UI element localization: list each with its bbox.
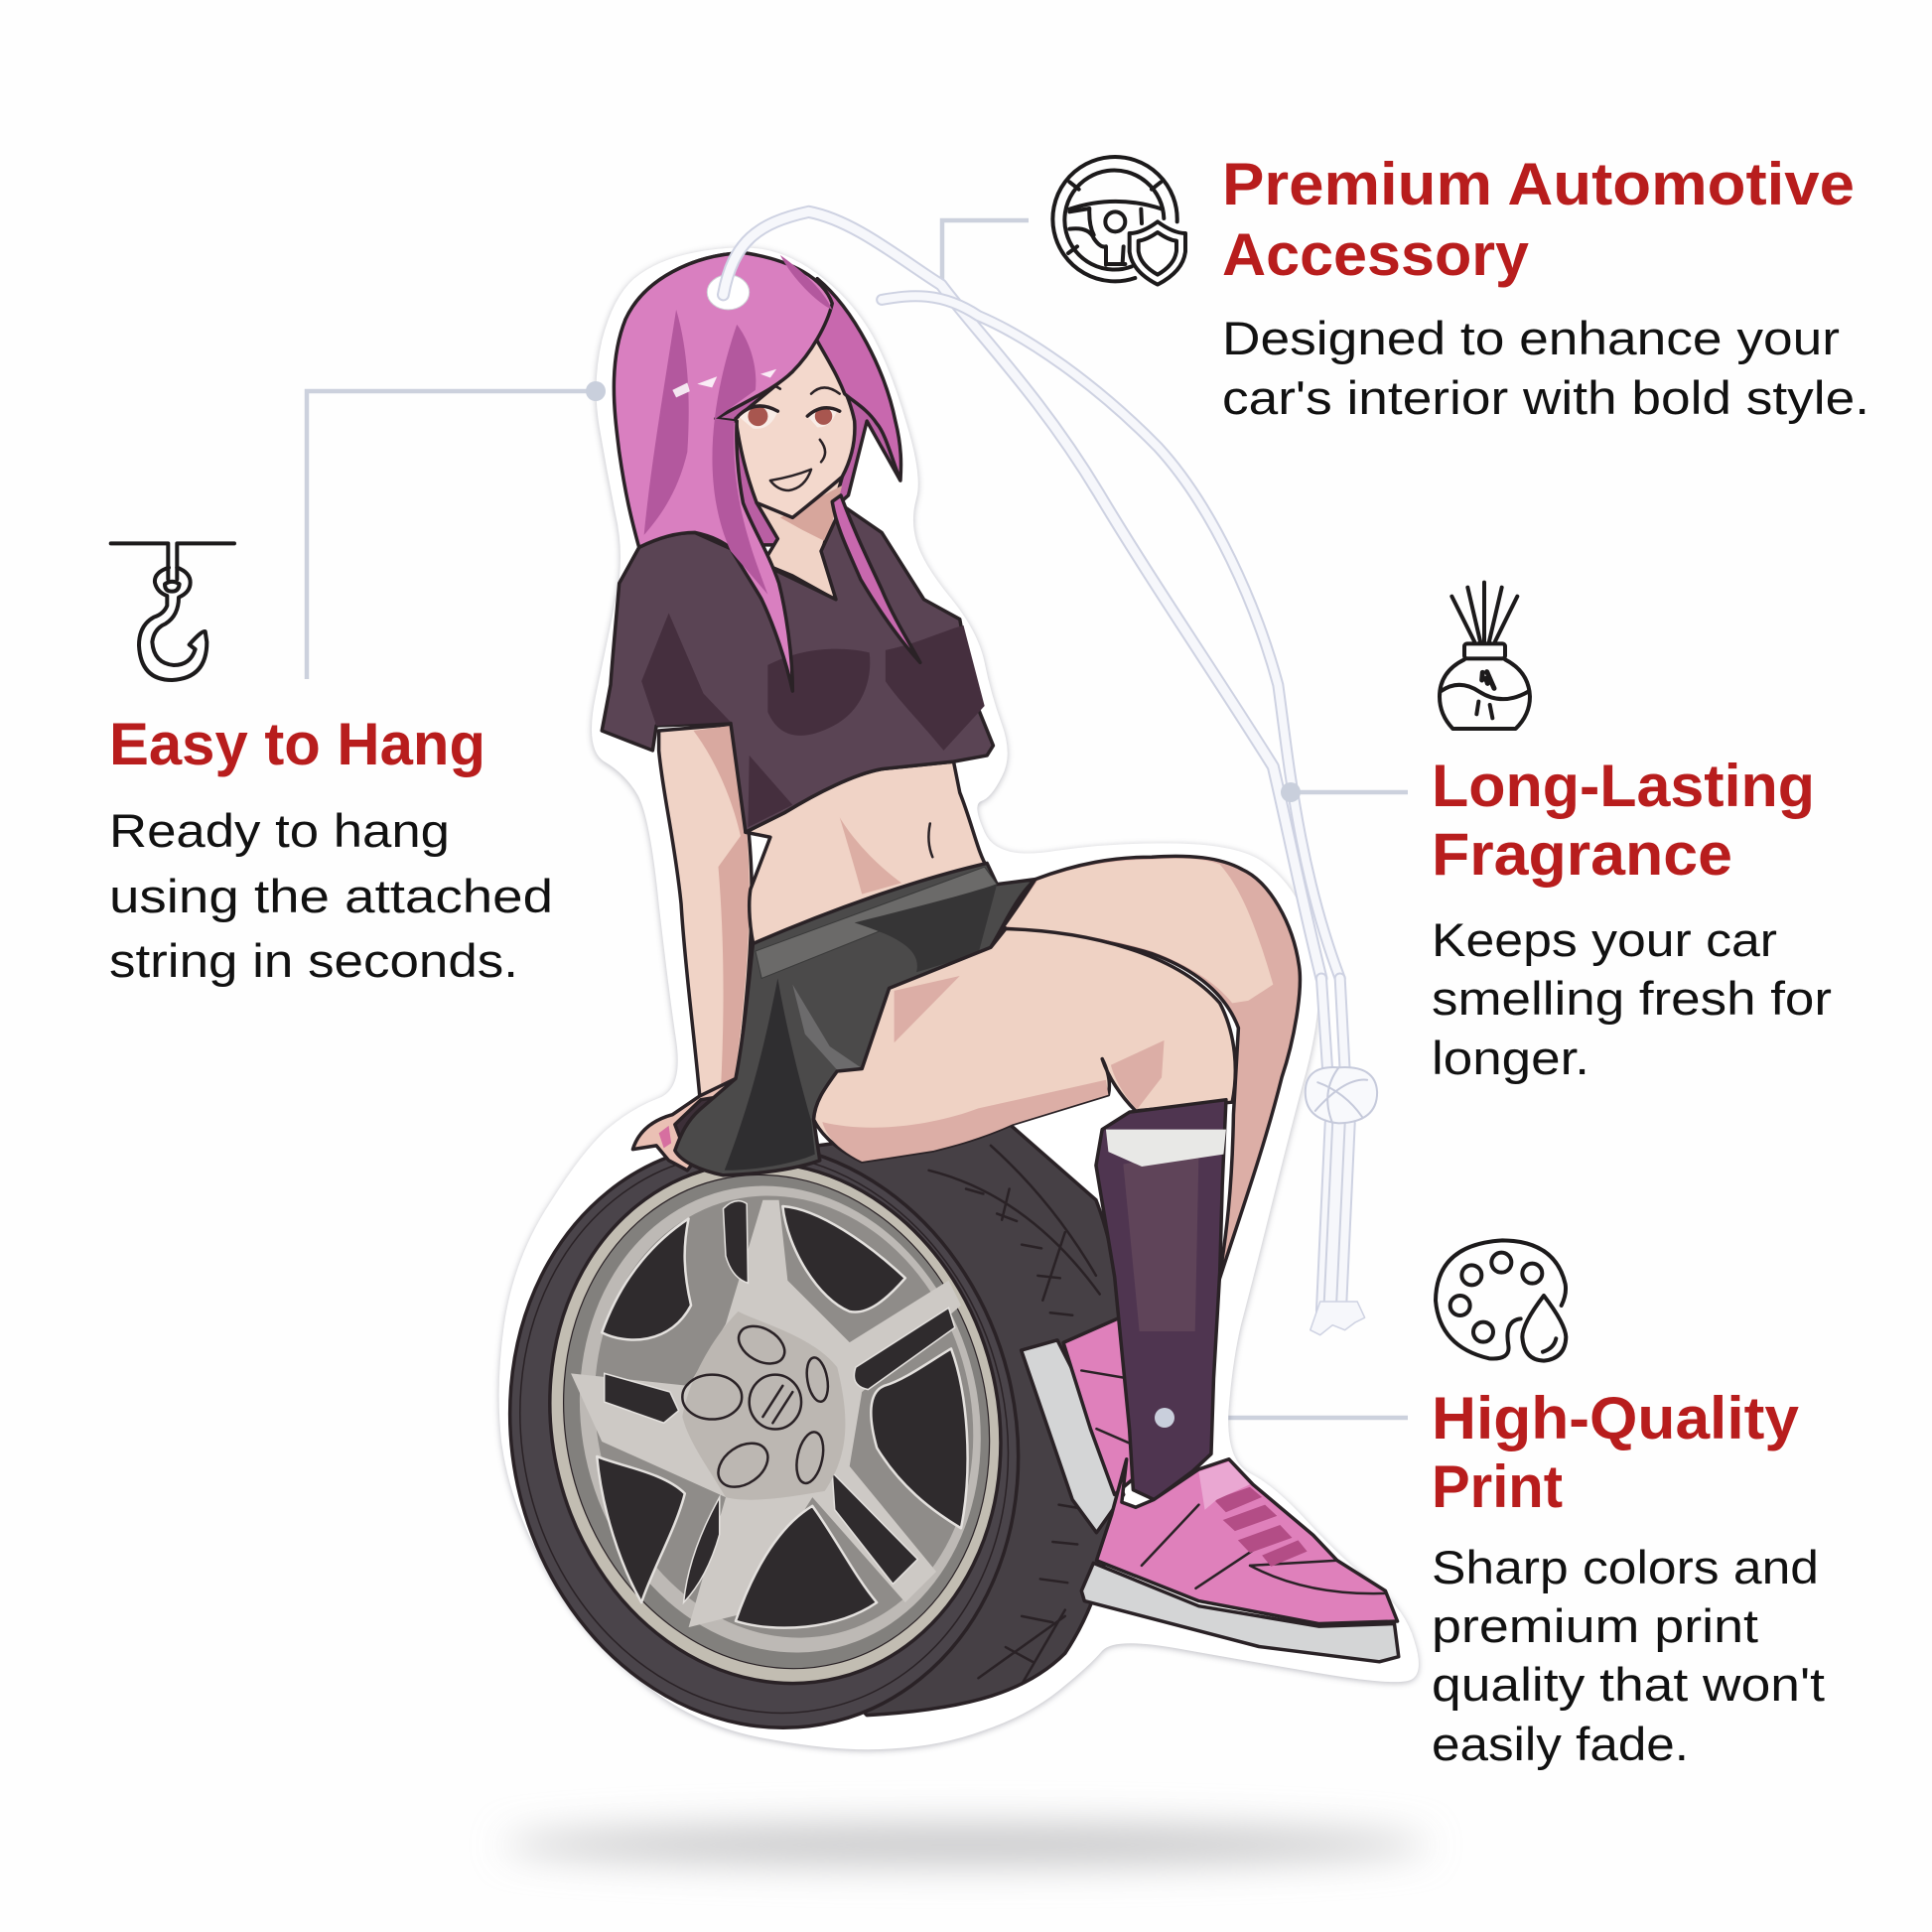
tread lines [929,1146,1100,1684]
text: high-quality print description: premium print [1432,1599,1758,1652]
eyes and mouth [738,407,777,429]
text: easy to hang description: string in seconds. [109,934,518,987]
spoke windows [597,1206,968,1628]
text: premium automotive accessory description: Designed to enhance your [1222,312,1840,364]
text: high-quality print description: Sharp colors and [1432,1541,1819,1593]
icon: hook [111,543,234,680]
icon: paint palette with drop [1436,1240,1566,1361]
far knee and lower leg [991,856,1300,1282]
near thigh [814,929,1235,1162]
text: long-lasting fragrance description: Keeps your car [1432,913,1777,966]
ground shadow [504,1825,1428,1864]
wheel and tire [449,1088,1124,1782]
heading: long-lasting fragrance [1432,753,1815,888]
text: long-lasting fragrance description [1432,913,1832,1084]
text: easy to hang description: Ready to hang [109,804,450,857]
icon: steering wheel with shield [1052,157,1185,285]
heading: long-lasting fragrance: Fragrance [1432,821,1732,888]
text: long-lasting fragrance description: longer. [1432,1032,1589,1084]
sock [1096,1100,1226,1500]
raised sneaker [1022,1317,1133,1533]
hanging hole [707,275,750,310]
hair [614,252,920,691]
heading: high-quality print: Print [1432,1453,1563,1520]
heading: high-quality print: High-Quality [1432,1385,1800,1451]
text: premium automotive accessory description [1222,312,1869,424]
heading: easy to hang: Easy to Hang [109,711,485,777]
hanging string [723,211,1377,1335]
legs [814,856,1300,1282]
text: high-quality print description: easily fade. [1432,1718,1689,1770]
icon: reed diffuser [1440,583,1530,729]
string knot [1306,1067,1377,1123]
air freshener card [449,211,1419,1782]
connector dots [586,381,1301,1428]
arm [632,725,752,1171]
text: premium automotive accessory description: car's interior with bold style. [1222,371,1869,424]
torso [746,761,987,953]
card white backing [499,247,1419,1749]
text: high-quality print description [1432,1541,1825,1770]
heading: premium automotive accessory: Premium Automotive [1222,151,1855,217]
spoke highlight [571,1200,961,1627]
spoke slots [605,1201,955,1602]
hub [682,1311,845,1500]
heading: high-quality print [1432,1385,1800,1520]
text: high-quality print description: quality that won't [1432,1658,1825,1711]
shirt [602,505,993,832]
planted sneaker [1081,1459,1399,1662]
text: long-lasting fragrance description: smelling fresh for [1432,972,1832,1025]
heading: premium automotive accessory: Accessory [1222,221,1530,288]
hand [632,1078,736,1171]
back hair [617,252,900,545]
text: easy to hang description [109,804,553,987]
rim [495,1114,1055,1731]
text: easy to hang description: using the attached [109,870,553,922]
neck and face [617,252,900,601]
skirt [675,863,1035,1175]
heading: long-lasting fragrance: Long-Lasting [1432,753,1815,819]
heading: premium automotive accessory [1222,151,1855,288]
connector lines [307,220,1408,1418]
